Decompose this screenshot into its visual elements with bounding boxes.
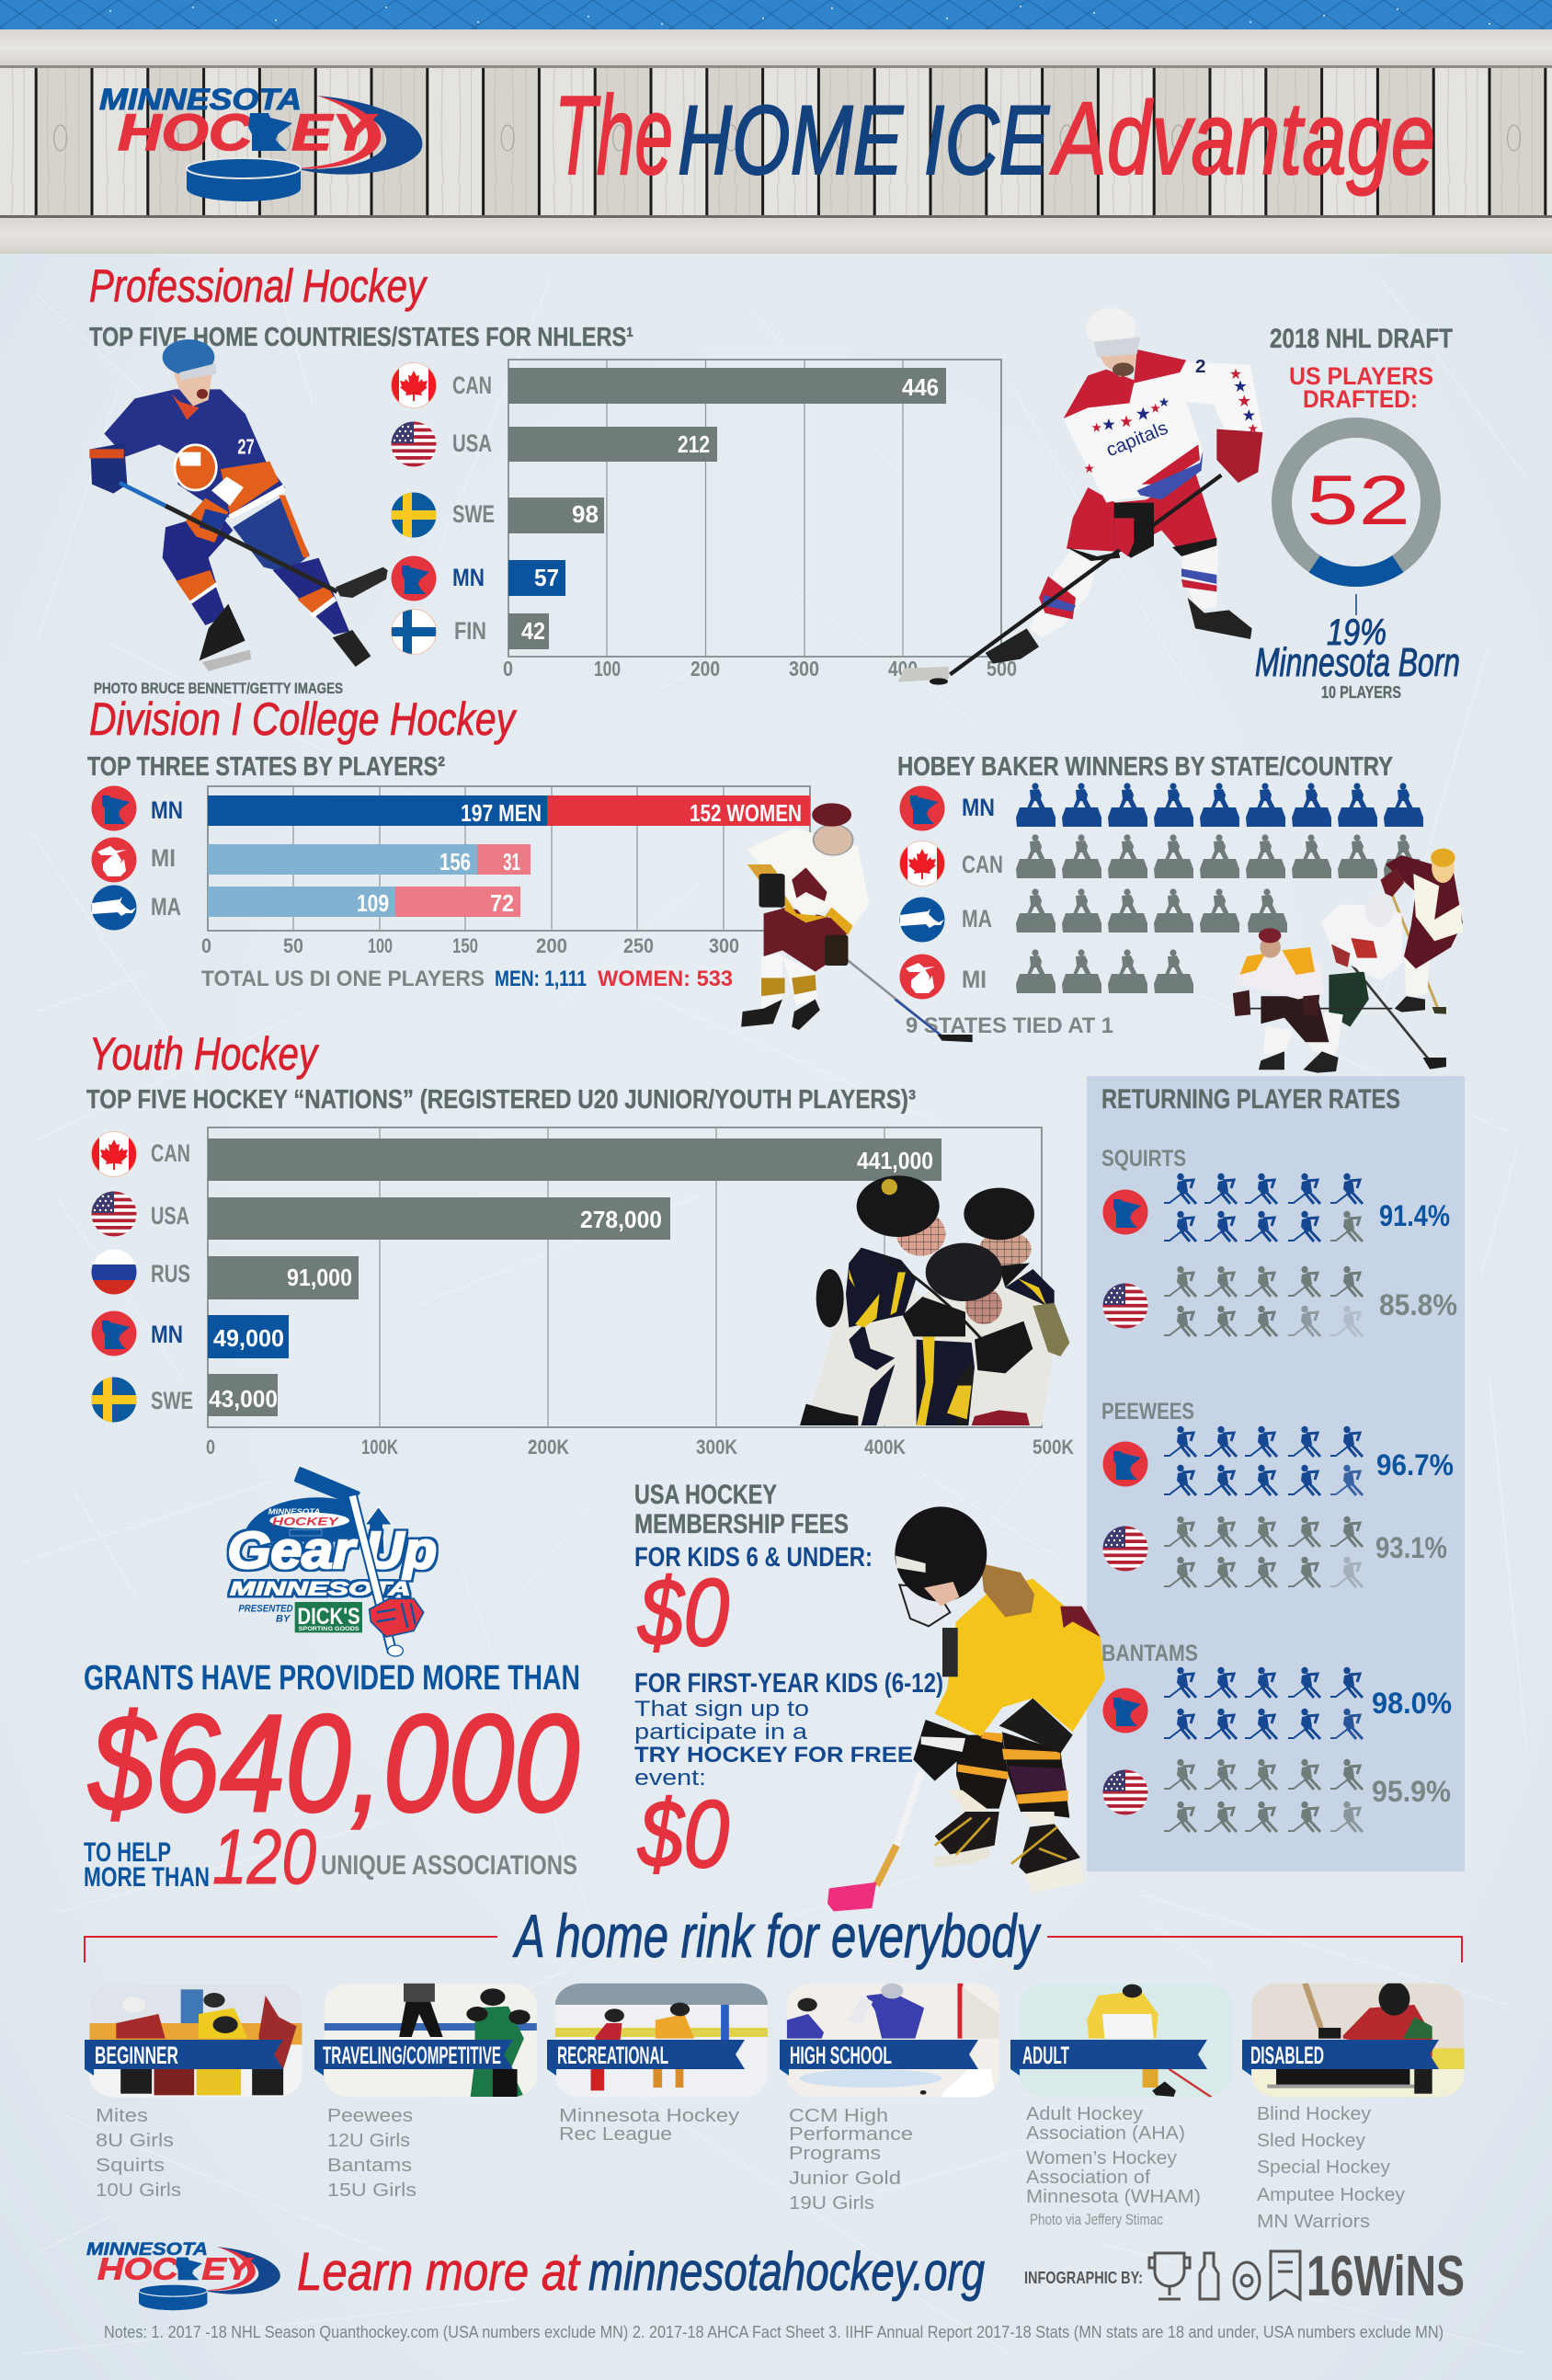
bar chart: NHLers: 98	[572, 500, 599, 528]
section heading: a home rink for everybody: A home rink for everybody	[512, 1902, 1042, 1970]
text: US players drafted: US PLAYERS	[1289, 362, 1433, 390]
logo: Gear Up Minnesota: MINNESOTA	[230, 1577, 411, 1599]
bar chart: NHLers: 212	[678, 430, 710, 458]
callout: membership fees: MEMBERSHIP FEES	[634, 1509, 849, 1539]
top blue net band	[0, 0, 1552, 29]
list: adult: Association (AHA)	[1026, 2123, 1185, 2144]
callout: membership fees	[634, 1480, 943, 1888]
heading: Professional Hockey: Professional Hockey	[89, 260, 428, 312]
legend: nations: MN	[151, 1321, 183, 1348]
credit: 16 Wins: 16WiNS	[1307, 2245, 1465, 2308]
group: Squirts: 91.4%	[1379, 1199, 1450, 1232]
group: Squirts	[1101, 1146, 1457, 1336]
logo: Gear Up Minnesota: SPORTING GOODS	[299, 1626, 359, 1632]
section heading: a home rink for everybody	[85, 1902, 1462, 1970]
bar chart: college players: 109	[357, 889, 389, 917]
bar chart: NHLers: 300	[789, 657, 819, 681]
list: adult: Adult Hockey	[1026, 2104, 1143, 2124]
totals line: TOTAL US DI ONE PLAYERS	[201, 967, 485, 991]
callout: grants: UNIQUE ASSOCIATIONS	[321, 1850, 577, 1881]
legend: nations: USA	[151, 1202, 189, 1230]
list: disabled: MN Warriors	[1257, 2212, 1370, 2232]
player: Islanders	[89, 339, 388, 671]
bar chart: youth players: 300K	[696, 1436, 737, 1459]
legend: country flags and labels: SWE	[452, 500, 495, 528]
player: girl with stick	[827, 1506, 1105, 1911]
logo: Minnesota Hockey	[99, 83, 422, 201]
heading: Hobey Baker: HOBEY BAKER WINNERS BY STATE/COUNTRY	[897, 752, 1393, 782]
totals line: MEN: 1,111	[495, 967, 587, 991]
bar chart: NHLers: 57	[534, 564, 559, 591]
players: college trio	[1233, 849, 1463, 1073]
photo: high school	[787, 1984, 999, 2098]
bar chart: NHLers	[503, 360, 1017, 681]
list: recreational: Rec League	[559, 2124, 672, 2145]
logo: Gear Up Minnesota: HOCKEY	[272, 1515, 339, 1528]
callout: membership fees: FOR FIRST-YEAR KIDS (6-12)	[634, 1668, 943, 1699]
wooden boards header	[0, 29, 1552, 254]
logo: footer Minnesota Hockey	[86, 2240, 280, 2310]
logo: Minnesota Hockey: HOC KEY	[118, 103, 377, 161]
panel: returning player rates	[1087, 1076, 1465, 1871]
bar chart: college players: 200	[536, 934, 567, 957]
photo: disabled	[1251, 1982, 1465, 2098]
callout: grants: GRANTS HAVE PROVIDED MORE THAN	[84, 1659, 580, 1698]
call to action: learn more: Learn more at	[297, 2242, 581, 2302]
group: Peewees: PEEWEES	[1101, 1399, 1194, 1425]
list: disabled: Special Hockey	[1257, 2157, 1390, 2178]
legend: nations	[91, 1131, 193, 1423]
bar chart: college players: 50	[283, 934, 303, 957]
list: adult	[1026, 2104, 1201, 2228]
title: HOME ICE	[678, 85, 1050, 195]
bar chart: youth players: 500K	[1033, 1436, 1074, 1459]
callout: grants: $640,000	[88, 1686, 579, 1840]
callout: membership fees: That sign up to	[634, 1697, 809, 1722]
heading: 2018 NHL draft: 2018 NHL DRAFT	[1270, 324, 1453, 354]
list: high school: Programs	[789, 2144, 881, 2164]
logo: Gear Up Minnesota: PRESENTED	[238, 1603, 293, 1614]
totals line	[201, 967, 733, 991]
ribbon: disabled: DISABLED	[1250, 2042, 1324, 2069]
bar chart: youth players	[206, 1127, 1074, 1459]
player: Capitals: 2	[1195, 356, 1205, 377]
group: Bantams	[1101, 1641, 1452, 1832]
legend: country flags and labels	[391, 362, 495, 655]
group: Peewees	[1101, 1399, 1454, 1587]
photo: youth players	[800, 1175, 1069, 1425]
logo: Gear Up Minnesota: Gear	[227, 1522, 358, 1580]
title: The	[554, 73, 673, 198]
legend: country flags and labels: FIN	[454, 617, 486, 645]
player: Gopher	[741, 803, 973, 1042]
list: beginner: 10U Girls	[96, 2180, 181, 2201]
callout: membership fees: FOR KIDS 6 & UNDER:	[634, 1542, 873, 1573]
legend: nations: RUS	[151, 1260, 190, 1287]
bar chart: college players: 72	[490, 889, 514, 917]
subheading: top three states: TOP THREE STATES BY PLAYERS²	[87, 752, 445, 782]
legend: country flags and labels: CAN	[452, 372, 492, 399]
callout: grants: 120	[212, 1814, 316, 1900]
list: beginner	[96, 2106, 181, 2201]
legend: country flags and labels: USA	[452, 429, 492, 457]
totals line: WOMEN: 533	[598, 967, 733, 991]
callout: membership fees: $0	[637, 1781, 729, 1888]
bar chart: NHLers: 100	[594, 657, 621, 681]
list: adult: Minnesota (WHAM)	[1026, 2187, 1201, 2207]
logo: Gear Up Minnesota	[227, 1469, 437, 1656]
pictogram: Hobey Baker winners: MI	[962, 966, 987, 993]
callout: membership fees: TRY HOCKEY FOR FREE	[634, 1743, 913, 1768]
callout: membership fees: event:	[634, 1766, 706, 1791]
callout: 19% Minnesota born: 19%	[1327, 612, 1387, 653]
list: beginner: Mites	[96, 2106, 148, 2126]
donut chart: 52 players	[1282, 428, 1431, 577]
photo: adult	[1019, 1984, 1232, 2098]
list: traveling: 15U Girls	[327, 2180, 417, 2201]
ribbon: beginner	[85, 2040, 283, 2076]
footnotes: Notes: 1. 2017 -18 NHL Season Quanthockey.com (USA numbers exclude MN) 2. 2017-18 AHCA Fact Sheet 3. IIHF Annual Report 2017-18 Stats (MN stats are 18 and under, USA numbers exclude MN)	[104, 2323, 1444, 2341]
bar chart: college players: 31	[503, 848, 520, 875]
photo: beginner	[89, 1984, 302, 2098]
group: Squirts: 85.8%	[1379, 1288, 1457, 1322]
bar chart: college players: 250	[623, 934, 654, 957]
bar chart: college players: 150	[452, 934, 478, 957]
title: Advantage	[1049, 81, 1435, 196]
heading: returning player rates: RETURNING PLAYER RATES	[1101, 1084, 1400, 1115]
logo: Gear Up Minnesota: Up	[365, 1522, 437, 1580]
list: traveling: 12U Girls	[327, 2131, 410, 2151]
list: recreational: Minnesota Hockey	[559, 2106, 739, 2126]
callout: membership fees: $0	[637, 1560, 729, 1666]
player: Capitals	[898, 308, 1262, 685]
list: disabled: Amputee Hockey	[1257, 2185, 1405, 2205]
ribbon: adult	[1010, 2040, 1207, 2076]
call to action: learn more: minnesotahockey.org	[588, 2242, 985, 2302]
ribbon: high school	[780, 2040, 978, 2076]
bar chart: NHLers: 42	[521, 617, 545, 645]
bar chart: NHLers: 500	[987, 657, 1017, 681]
bar chart: college players	[201, 786, 810, 957]
player: Capitals: capitals	[1103, 418, 1170, 461]
logo: footer Minnesota Hockey: HOC KEY	[97, 2253, 253, 2287]
list: high school: Junior Gold	[789, 2168, 901, 2189]
legend: states: MN	[151, 796, 183, 824]
list: high school: Performance	[789, 2124, 913, 2145]
legend: nations: CAN	[151, 1139, 190, 1167]
bar chart: college players: 156	[439, 848, 471, 875]
photo credit: PHOTO BRUCE BENNETT/GETTY IMAGES	[94, 680, 343, 697]
bar chart: college players: 100	[368, 934, 393, 957]
pictogram: Hobey Baker winners: CAN	[962, 851, 1003, 878]
group: Bantams: BANTAMS	[1101, 1641, 1198, 1666]
list: beginner: Squirts	[96, 2156, 165, 2176]
bar chart: youth players: 43,000	[209, 1385, 278, 1413]
bar chart: NHLers: 400	[888, 657, 918, 681]
group: Bantams: 98.0%	[1372, 1687, 1452, 1720]
list: disabled: Blind Hockey	[1257, 2104, 1371, 2124]
bar chart: NHLers: 200	[690, 657, 720, 681]
group: Bantams: 95.9%	[1372, 1775, 1451, 1808]
bar chart: youth players: 0	[206, 1436, 215, 1459]
list: adult: Women’s Hockey	[1026, 2148, 1177, 2168]
list: beginner: 8U Girls	[96, 2131, 174, 2151]
list: traveling: Bantams	[327, 2156, 412, 2176]
list: high school: CCM High	[789, 2106, 888, 2126]
legend: states	[92, 785, 183, 931]
list: adult: Association of	[1026, 2168, 1150, 2188]
bar chart: college players: 152 WOMEN	[690, 799, 802, 827]
ribbon: recreational: RECREATIONAL	[557, 2042, 668, 2069]
ribbon: beginner: BEGINNER	[95, 2042, 178, 2069]
bar chart: college players: 0	[201, 934, 211, 957]
subheading: top five hockey nations: TOP FIVE HOCKEY “NATIONS” (REGISTERED U20 JUNIOR/YOUTH PLAYERS)³	[86, 1085, 916, 1115]
list: adult: Photo via Jeffery Stimac	[1030, 2211, 1163, 2228]
ribbon: traveling: TRAVELING/COMPETITIVE	[323, 2042, 501, 2069]
photo: traveling	[325, 1984, 537, 2098]
group: Peewees: 93.1%	[1375, 1531, 1447, 1564]
logo: Gear Up Minnesota: MINNESOTA	[268, 1508, 321, 1516]
bar chart: youth players: 100K	[361, 1436, 398, 1459]
card photos	[89, 1984, 768, 2098]
callout: membership fees: participate in a	[634, 1720, 808, 1745]
legend: nations: SWE	[151, 1387, 193, 1414]
bar chart: youth players: 441,000	[857, 1147, 933, 1174]
call to action: learn more	[297, 2242, 985, 2302]
list: recreational	[559, 2106, 739, 2145]
bar chart: youth players: 200K	[528, 1436, 569, 1459]
text: US players drafted	[1289, 362, 1433, 413]
legend: states: MI	[151, 844, 176, 872]
list: high school: 19U Girls	[789, 2193, 874, 2214]
title	[554, 73, 1435, 198]
group: Peewees: 96.7%	[1376, 1448, 1454, 1482]
logo: Gear Up Minnesota: BY	[276, 1613, 291, 1624]
credit: 16 Wins: INFOGRAPHIC BY:	[1024, 2269, 1143, 2287]
callout: grants: MORE THAN	[84, 1862, 210, 1893]
list: traveling	[327, 2106, 417, 2201]
list: high school	[789, 2106, 913, 2214]
pictogram: Hobey Baker winners	[899, 783, 1423, 999]
text: US players drafted: DRAFTED:	[1303, 385, 1418, 413]
bar chart: NHLers: 446	[902, 373, 939, 401]
ribbon: disabled	[1242, 2040, 1439, 2076]
ribbon: adult: ADULT	[1022, 2042, 1069, 2069]
logo: footer Minnesota Hockey: MINNESOTA	[86, 2240, 208, 2260]
player: Islanders: 27	[237, 434, 255, 458]
bar chart: college players: 197 MEN	[461, 799, 542, 827]
legend: states: MA	[151, 893, 181, 921]
bar chart: youth players: 400K	[864, 1436, 906, 1459]
bar chart: youth players: 91,000	[287, 1264, 352, 1291]
credit: 16 Wins	[1024, 2245, 1465, 2308]
pictogram: Hobey Baker winners: MN	[962, 794, 995, 821]
callout: 19% Minnesota born: 10 PLAYERS	[1321, 683, 1401, 702]
ribbon: high school: HIGH SCHOOL	[790, 2042, 892, 2069]
bar chart: college players: 300	[709, 934, 739, 957]
photo: recreational	[555, 1984, 768, 2098]
logo: Minnesota Hockey: MINNESOTA	[99, 83, 302, 116]
callout: grants	[84, 1659, 580, 1900]
subheading: top five countries: TOP FIVE HOME COUNTRIES/STATES FOR NHLERS¹	[89, 323, 633, 352]
bar chart: youth players: 278,000	[580, 1206, 662, 1233]
ribbon: traveling	[314, 2040, 513, 2076]
text: 9 states tied at 1: 9 STATES TIED AT 1	[906, 1013, 1113, 1038]
list: disabled	[1257, 2104, 1405, 2232]
list: traveling: Peewees	[327, 2106, 413, 2126]
heading: Division I College Hockey: Division I College Hockey	[89, 693, 517, 745]
pictogram: Hobey Baker winners: MA	[962, 905, 992, 933]
callout: 19% Minnesota born: Minnesota Born	[1255, 640, 1460, 685]
heading: Youth Hockey: Youth Hockey	[89, 1028, 319, 1080]
donut chart: 52 players: 52	[1307, 462, 1410, 540]
group: Squirts: SQUIRTS	[1101, 1146, 1186, 1172]
logo: Gear Up Minnesota: DICK'S	[297, 1604, 360, 1630]
list: disabled: Sled Hockey	[1257, 2131, 1365, 2151]
legend: country flags and labels: MN	[452, 564, 485, 591]
callout: 19% Minnesota born	[1255, 594, 1460, 702]
bar chart: youth players: 49,000	[213, 1324, 284, 1352]
callout: membership fees: USA HOCKEY	[634, 1480, 777, 1510]
callout: grants: TO HELP	[84, 1837, 171, 1868]
bar chart: NHLers: 0	[503, 657, 513, 681]
